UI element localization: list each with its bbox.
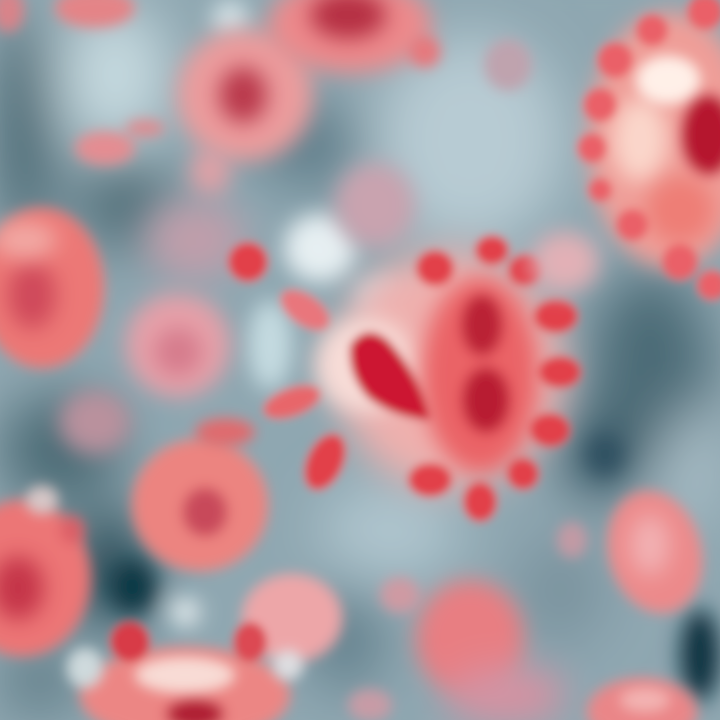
virus: lower right xyxy=(557,480,715,624)
central red drop xyxy=(350,332,430,420)
virus: top right large xyxy=(577,0,720,300)
virus: top centre right xyxy=(268,0,441,73)
virus: bottom right xyxy=(587,678,697,720)
virus: faint centre left xyxy=(59,163,415,454)
virus: central with spikes xyxy=(228,232,599,522)
virus: lower centre left xyxy=(132,418,268,571)
virus: left middle xyxy=(0,208,104,368)
virus: faint top centre xyxy=(484,39,532,91)
virus: top left fragment xyxy=(0,0,135,32)
virus: top centre xyxy=(75,29,313,196)
virus: bottom centre left xyxy=(67,574,342,720)
virus: lower left xyxy=(0,486,90,656)
virus: bottom centre right xyxy=(348,577,565,720)
